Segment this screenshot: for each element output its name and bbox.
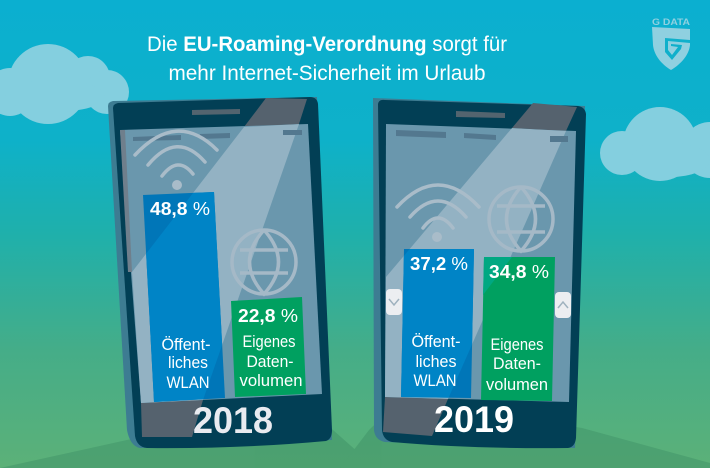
bar: Eigenes Datenvolumen: volumen	[240, 371, 302, 390]
globe icon	[232, 230, 296, 294]
bar: Öffentliches WLAN: WLAN	[166, 373, 210, 392]
speaker	[456, 111, 505, 118]
hills	[0, 400, 710, 468]
year label: 2019	[434, 399, 514, 440]
phone 2018	[108, 97, 332, 448]
bar: Öffentliches WLAN: Öffent-	[162, 335, 210, 354]
phone back	[373, 98, 585, 448]
logo: G DATA shield	[652, 17, 690, 70]
speaker	[192, 109, 240, 115]
screen edge	[120, 130, 132, 272]
wifi icon	[397, 185, 479, 240]
bar: Öffentliches WLAN: liches	[168, 353, 208, 372]
bezel reflection	[383, 103, 577, 436]
bar: Eigenes Datenvolumen	[481, 257, 555, 401]
bezel reflection	[141, 98, 307, 437]
cloud right	[600, 107, 710, 181]
bar: Eigenes Datenvolumen: 34,8 %	[489, 261, 549, 282]
title: mehr Internet-Sicherheit im Urlaub	[168, 62, 486, 85]
screen	[120, 124, 322, 403]
cloud left	[0, 44, 129, 124]
bar: Öffentliches WLAN: Öffent-	[412, 332, 460, 351]
down arrow button	[386, 289, 402, 315]
bar: Öffentliches WLAN: liches	[416, 352, 456, 371]
screen	[385, 124, 576, 402]
bar: Öffentliches WLAN	[143, 192, 225, 402]
screen reflection	[385, 128, 566, 399]
bar: Eigenes Datenvolumen: Eigenes	[242, 332, 296, 351]
bar: Eigenes Datenvolumen: Eigenes	[490, 335, 544, 354]
bar: Öffentliches WLAN: WLAN	[414, 371, 456, 390]
status bars	[133, 130, 302, 141]
year label: 2018	[193, 400, 273, 441]
bar: Eigenes Datenvolumen: Daten-	[246, 352, 294, 371]
phone back	[108, 97, 332, 448]
status bars	[396, 130, 568, 142]
logo: G DATA shield: G DATA	[652, 17, 690, 28]
globe icon	[489, 187, 553, 251]
bar: Eigenes Datenvolumen: volumen	[486, 375, 548, 394]
bar: Öffentliches WLAN: 48,8 %	[150, 198, 210, 219]
bar: Öffentliches WLAN	[401, 249, 474, 398]
wifi icon	[135, 131, 217, 188]
phone body	[113, 97, 332, 448]
phone body	[378, 100, 586, 448]
phone 2019	[373, 98, 586, 448]
screen reflection	[132, 124, 299, 403]
bar: Eigenes Datenvolumen: Daten-	[493, 354, 541, 373]
bar: Eigenes Datenvolumen	[231, 297, 306, 397]
up arrow button	[555, 292, 571, 318]
bar: Öffentliches WLAN: 37,2 %	[410, 253, 468, 274]
title	[147, 33, 507, 85]
bar: Eigenes Datenvolumen: 22,8 %	[238, 305, 298, 326]
title: Die EU-Roaming-Verordnung sorgt für	[147, 33, 507, 56]
